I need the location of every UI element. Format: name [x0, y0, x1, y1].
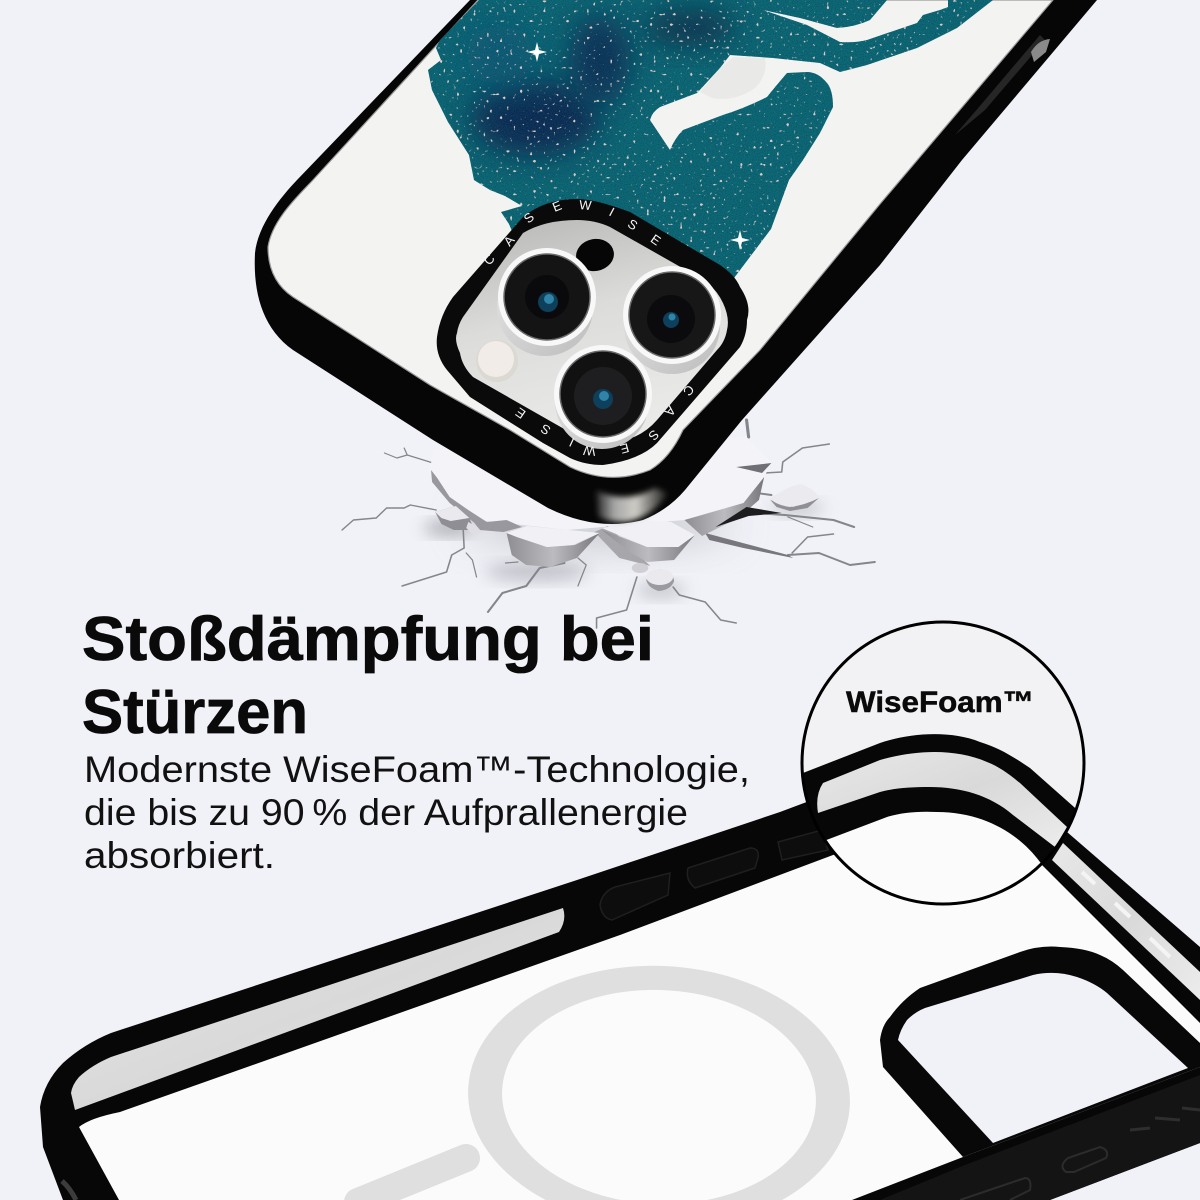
heading: Stoßdämpfung bei: [82, 605, 654, 674]
brand top: CASEWISE: [480, 197, 664, 268]
channel highlights: [1082, 872, 1170, 957]
lower band sheen: [880, 1075, 1200, 1200]
bottom edge buttons and speaker: [960, 1147, 1107, 1200]
bump frame: [437, 199, 748, 465]
camera cutout frame: [880, 947, 1200, 1157]
lens one: [497, 248, 596, 356]
body text: Modernste WiseFoam™-Technologie,: [84, 749, 750, 790]
back panel: [268, 0, 1053, 477]
wall cracks from impact: [342, 420, 875, 628]
magnifier circle: WiseFoam: [800, 620, 1086, 906]
rock centre left: [507, 526, 600, 567]
charging port hole: [62, 1181, 76, 1200]
galaxy artwork: [428, 0, 993, 278]
side buttons: [600, 830, 828, 920]
rocks lower: [632, 563, 674, 591]
bright stars: [527, 42, 750, 250]
microphone: [574, 236, 616, 274]
MagSafe shadow on panel: [700, 57, 766, 99]
camera bump: [437, 197, 748, 465]
body text: die bis zu 90 % der Aufprallenergie: [84, 792, 688, 833]
wedge crack: [705, 533, 793, 558]
MagSafe ring: [463, 958, 855, 1200]
cracked plate: [430, 437, 771, 530]
rock left small: [435, 506, 482, 534]
edge texture: [1130, 1108, 1200, 1130]
top phone with clear case: [255, 0, 1097, 524]
body text: [84, 749, 750, 876]
MagSafe pill: [358, 1158, 466, 1200]
circle outline: [802, 622, 1084, 904]
side bumper sheen: [955, 35, 1045, 135]
heading: Stürzen: [82, 678, 308, 747]
plate edge right: [684, 477, 764, 536]
lower case interior view: [40, 770, 1200, 1200]
foam channel left: [71, 908, 564, 1110]
black bumper: [255, 0, 1097, 524]
flash: [476, 340, 518, 382]
lens three: [554, 345, 652, 449]
button highlight: [1031, 39, 1050, 62]
white clear back: [79, 824, 1200, 1200]
heading: [82, 605, 654, 747]
plate edge left: [431, 470, 522, 532]
corner glare: [596, 488, 668, 522]
foam channel right: [1052, 843, 1200, 1000]
magnified view: [804, 734, 1075, 864]
black frame: [40, 770, 1200, 1200]
rock right: [770, 484, 819, 511]
body text: absorbiert.: [84, 835, 275, 876]
lens two: [623, 266, 721, 374]
rock centre right: [602, 520, 695, 562]
bump interior: [456, 220, 728, 443]
circle label: WiseFoam™: [846, 686, 1034, 719]
brand bottom: CASEWISE: [512, 382, 697, 459]
